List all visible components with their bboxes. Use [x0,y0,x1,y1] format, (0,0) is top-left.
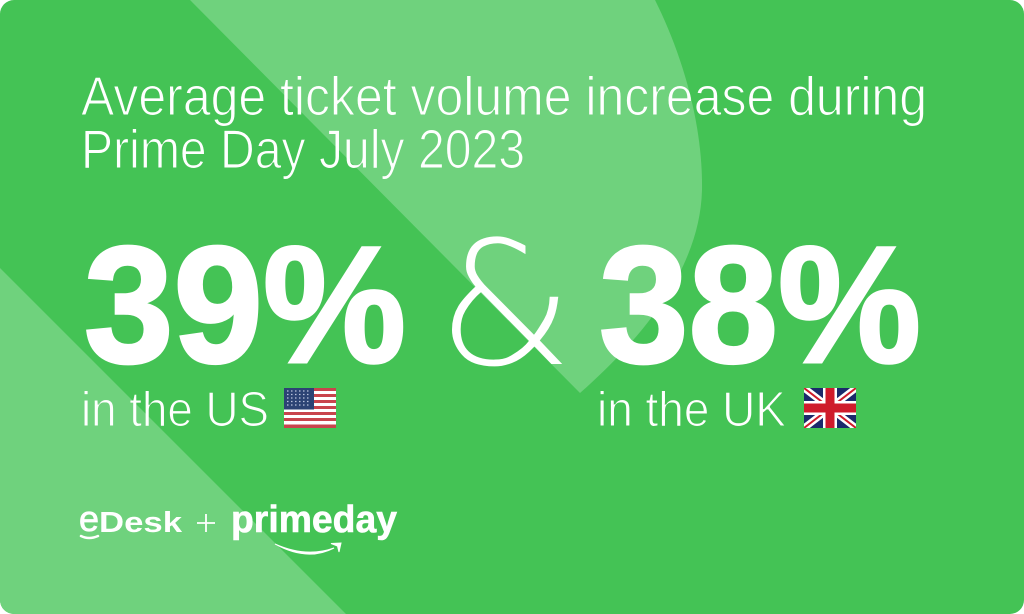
title [81,65,927,180]
label: in the UK: in the UK [597,383,786,437]
light green leaf shape [190,0,702,393]
title: Prime Day July 2023 [81,118,525,180]
icon: US flag [284,388,336,428]
logo: eDesk [79,498,183,539]
logo: prime day: primeday [231,499,397,541]
statistic: 39%: 39% [84,213,406,398]
icon: UK flag [804,388,856,428]
light green corner triangle [0,268,346,614]
statistic: 38%: 38% [599,213,921,398]
plus sign [197,514,215,532]
logo: eDesk: Desk [99,507,183,539]
title: Average ticket volume increase during [81,65,927,127]
logo: eDesk: e [79,498,99,539]
icon: amazon smile [275,543,341,554]
label: in the US: in the US [81,383,269,437]
ampersand: & [437,204,573,405]
